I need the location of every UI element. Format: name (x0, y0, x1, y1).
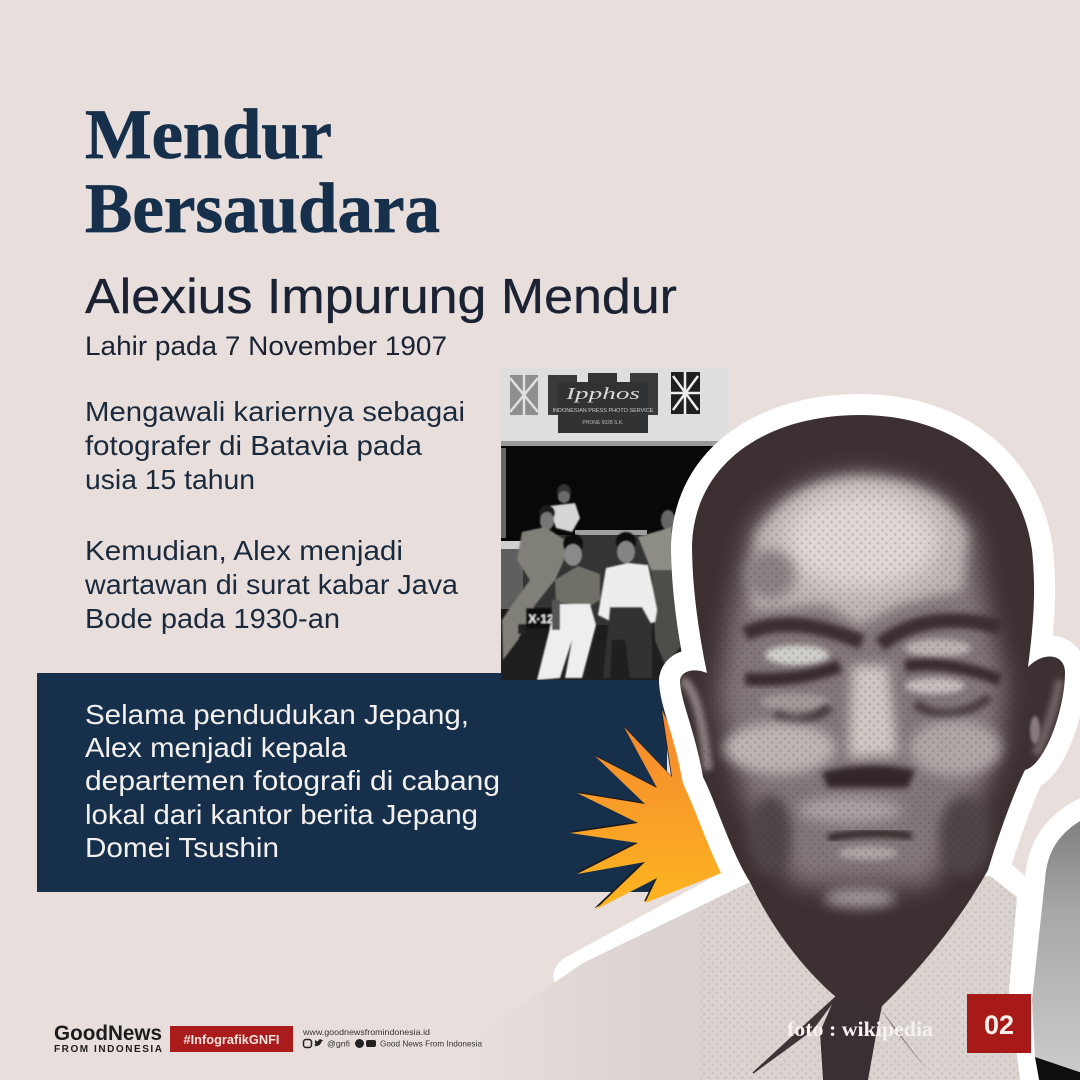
cheeks (724, 722, 836, 774)
panel: navy callout (37, 673, 667, 892)
callout text: Alex menjadi kepala (85, 732, 347, 763)
left seated man (502, 505, 565, 660)
eye lids (765, 645, 829, 665)
icon: twitter (314, 1039, 324, 1046)
page number badge: 02 (984, 1010, 1014, 1040)
windows (510, 372, 700, 415)
right standing man (638, 510, 682, 665)
page number badge (967, 994, 1031, 1053)
footer logo: GoodNews From Indonesia (54, 1022, 162, 1055)
text block: journalist: Bode pada 1930-an (85, 603, 340, 634)
right ear highlight (1030, 716, 1040, 744)
footer links and social icons: @gnfi (327, 1038, 350, 1048)
callout text: lokal dari kantor berita Jepang (85, 799, 478, 830)
collar and tie (753, 995, 927, 1080)
birth date: Lahir pada 7 November 1907 (85, 331, 447, 361)
footer links and social icons: www.goodnewsfromindonesia.id (302, 1027, 430, 1037)
icon: instagram (304, 1040, 312, 1048)
chin (824, 888, 896, 908)
people (502, 484, 682, 680)
icon: youtube (366, 1040, 376, 1047)
mouth (828, 833, 912, 838)
icon: orange starburst (569, 708, 724, 910)
licence plate (526, 608, 556, 628)
text block: journalist (84, 535, 458, 634)
sign: Ipphos (564, 384, 641, 403)
sign (553, 382, 654, 433)
icon: facebook (355, 1039, 364, 1048)
photo credit: foto : wikipedia (787, 1017, 934, 1041)
portrait: Alexius Mendur (553, 394, 1080, 1080)
ears (682, 680, 708, 770)
sticker outline: shoulders (553, 855, 1038, 1080)
text block: early career: Mengawali kariernya sebagai (85, 396, 465, 427)
text block: early career (85, 396, 465, 495)
lit face (718, 474, 1005, 885)
photo: Ipphos office group (501, 367, 729, 680)
head and face (670, 405, 1080, 1015)
subtitle: name: Alexius Impurung Mendur (85, 270, 677, 324)
eye shadows (745, 666, 840, 679)
text block: journalist: wartawan di surat kabar Java (84, 569, 458, 600)
callout text: departemen fotografi di cabang (85, 765, 500, 796)
title: Mendur (85, 96, 332, 174)
text block: early career: fotografer di Batavia pada (85, 430, 422, 461)
text block: journalist: Kemudian, Alex menjadi (85, 535, 403, 566)
eyebrows (745, 625, 862, 642)
porch and ground (501, 541, 522, 549)
jaw shadow (748, 795, 792, 875)
building wall (501, 367, 729, 445)
hashtag badge (170, 1026, 293, 1052)
shirt (470, 876, 1020, 1080)
callout text (85, 699, 500, 863)
portrait: second person at right edge (1032, 818, 1080, 1080)
footer links and social icons (302, 1027, 482, 1048)
title: Bersaudara (85, 170, 440, 248)
licence plate: X·12 (528, 612, 554, 626)
back man (549, 484, 580, 532)
sign: INDONESIAN PRESS PHOTO SERVICE (553, 408, 654, 414)
callout text: Selama pendudukan Jepang, (85, 699, 469, 730)
front centre man (537, 534, 600, 680)
forehead highlight (752, 477, 968, 625)
sticker outline: head (680, 415, 1065, 1008)
callout text: Domei Tsushin (85, 832, 279, 863)
title (85, 96, 440, 248)
text block: early career: usia 15 tahun (85, 464, 255, 495)
nose (848, 665, 898, 758)
sign: PHONE 5028 S.K. (582, 420, 624, 426)
hashtag badge: #InfografikGNFI (184, 1032, 280, 1047)
footer logo: GoodNews From Indonesia: FROM INDONESIA (54, 1044, 162, 1055)
upper lip (798, 797, 902, 823)
footer logo: GoodNews From Indonesia: GoodNews (54, 1022, 162, 1045)
footer links and social icons: Good News From Indonesia (380, 1038, 482, 1048)
front right man (598, 532, 657, 678)
